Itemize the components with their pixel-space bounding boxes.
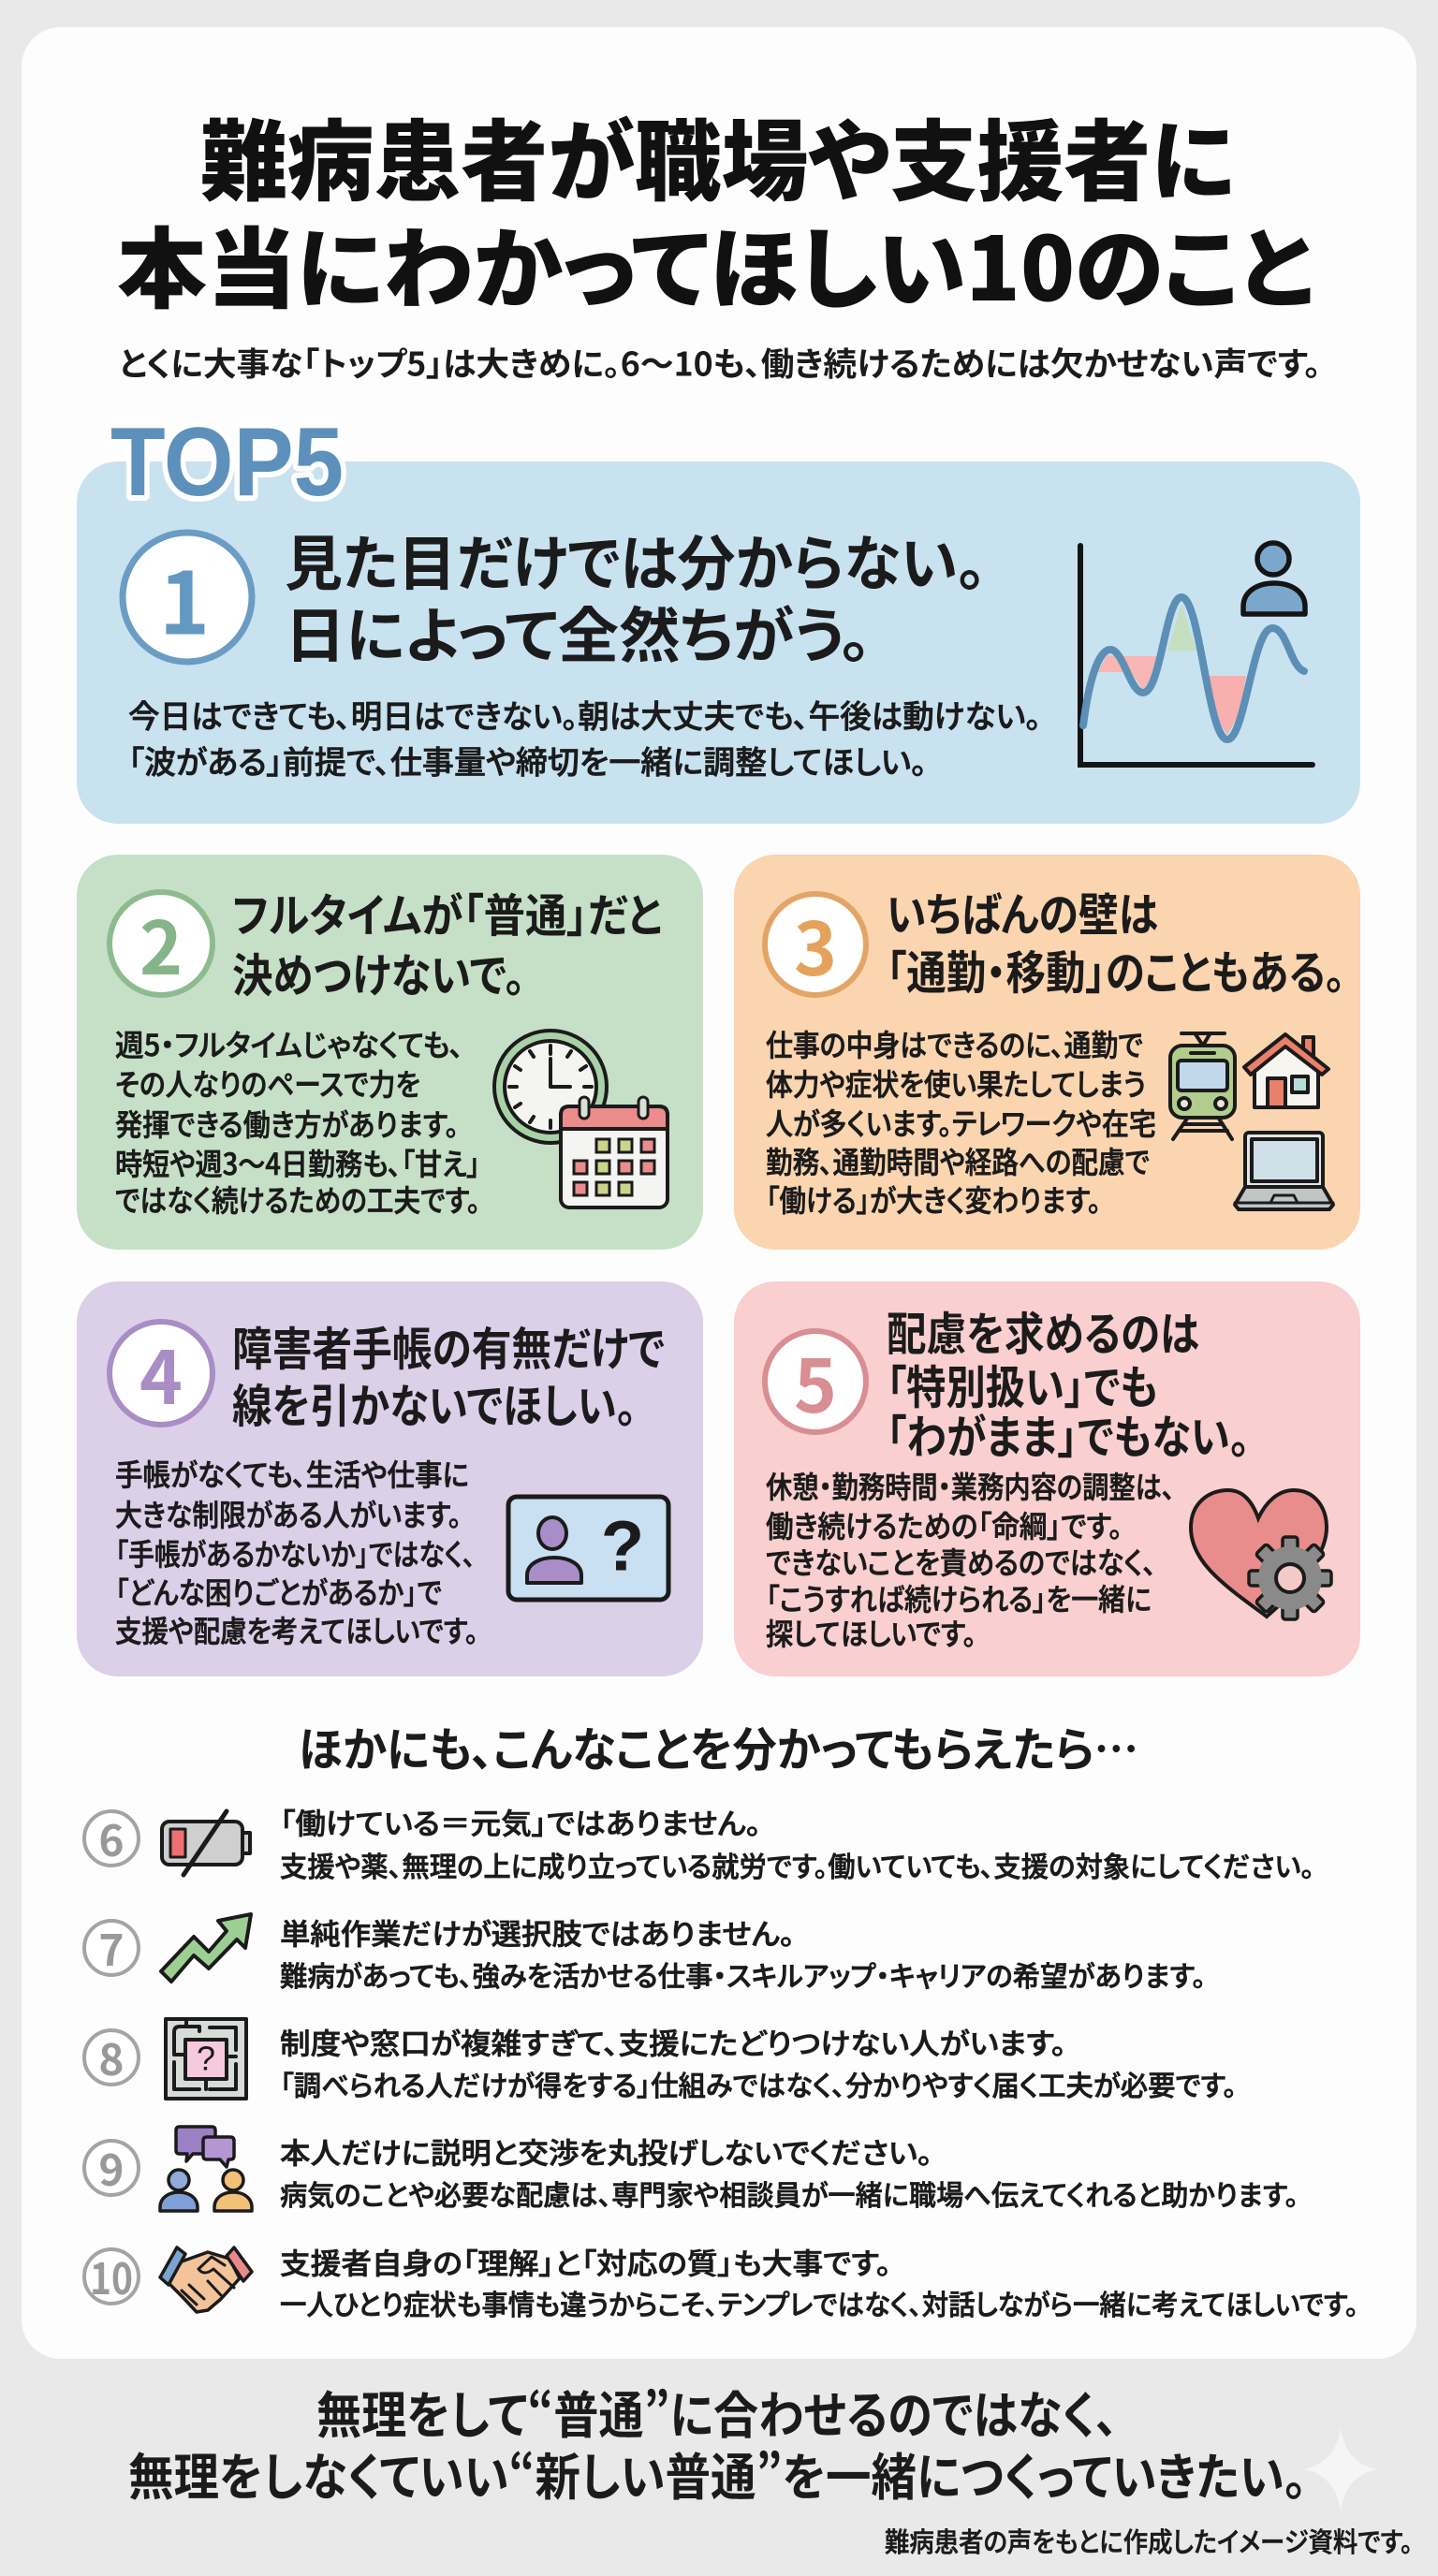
icon: handshake [160, 2247, 252, 2312]
heading 2: 決めつけないで。 [232, 940, 525, 1005]
text 10: 支援者自身の「理解」と「対応の質」も大事です。 [280, 2241, 891, 2282]
footer message [128, 2374, 1307, 2510]
text 7 [280, 1911, 1206, 1995]
body 3: 「働ける」が大きく変わります。 [766, 1178, 1101, 1221]
TOP5 label: TOP5 [110, 408, 344, 517]
footer message: 無理をしなくていい“新しい普通”を一緒につくっていきたい。 [128, 2436, 1307, 2510]
list item 6 [84, 1801, 1314, 1885]
body 5 [766, 1464, 1175, 1654]
list item 10 [84, 2241, 1358, 2323]
text 7: 難病があっても、強みを活かせる仕事・スキルアップ・キャリアの希望があります。 [280, 1954, 1206, 1995]
heading 4: 線を引かないでほしい。 [232, 1370, 637, 1436]
number badge 3 [765, 892, 866, 997]
body 1 [128, 691, 1041, 783]
number badge 5: 5 [794, 1329, 837, 1434]
sparkle [1303, 2428, 1377, 2510]
body 5: 休憩・勤務時間・業務内容の調整は、 [766, 1464, 1175, 1507]
list item 7 [84, 1911, 1206, 1995]
body 2: 週5・フルタイムじゃなくても、 [115, 1022, 463, 1065]
panel: card 3 [734, 855, 1360, 1250]
subtitle: とくに大事な「トップ5」は大きめに。6〜10も、働き続けるためには欠かせない声です。 [119, 339, 1321, 386]
panel: card 1 [77, 408, 1360, 824]
number badge 3: 3 [794, 892, 837, 997]
icon: clock and calendar [494, 1031, 668, 1208]
footer message: 無理をして“普通”に合わせるのではなく、 [316, 2374, 1118, 2449]
body 3: 体力や症状を使い果たしてしまう [766, 1061, 1146, 1105]
body 4: 手帳がなくても、生活や仕事に [115, 1452, 469, 1495]
heading 3: 「通勤・移動」のこともある。 [887, 936, 1345, 1003]
body 4: 「どんな困りごとがあるか」で [115, 1570, 442, 1613]
number badge 2 [110, 891, 213, 996]
badge 6 [84, 1808, 139, 1869]
text 8: 制度や窓口が複雑すぎて、支援にたどりつけない人がいます。 [280, 2020, 1066, 2063]
text 10 [280, 2241, 1358, 2323]
badge 7: 7 [98, 1917, 125, 1979]
body 4: 大きな制限がある人がいます。 [115, 1492, 462, 1535]
text 8: 「調べられる人だけが得をする」仕組みではなく、分かりやすく届く工夫が必要です。 [280, 2063, 1237, 2104]
number badge 2: 2 [139, 891, 183, 996]
text 9: 本人だけに説明と交渉を丸投げしないでください。 [280, 2130, 932, 2172]
badge 8: 8 [98, 2027, 125, 2088]
body 4 [115, 1452, 478, 1651]
badge 6: 6 [98, 1808, 125, 1869]
title: 本当にわかってほしい10のこと [117, 199, 1313, 327]
number badge 5 [765, 1329, 866, 1434]
title: 難病患者が職場や支援者に [200, 92, 1235, 219]
icon: two people talking [160, 2127, 252, 2211]
icon: train, house and laptop [1170, 1033, 1333, 1209]
text 9 [280, 2130, 1299, 2214]
body 5: 探してほしいです。 [766, 1611, 976, 1654]
text 6: 支援や薬、無理の上に成り立っている就労です。働いていても、支援の対象にしてください。 [280, 1844, 1314, 1885]
heading 1 [285, 517, 987, 675]
icon: wave chart with person [1080, 543, 1313, 765]
heading 5: 「わがまま」でもない。 [887, 1400, 1250, 1468]
heading 1: 日によって全然ちがう。 [285, 589, 872, 675]
heading 1: 見た目だけでは分からない。 [285, 517, 987, 603]
body 4: 支援や配慮を考えてほしいです。 [115, 1608, 478, 1651]
heading 5: 配慮を求めるのは [887, 1297, 1199, 1365]
number badge 1: 1 [159, 535, 210, 659]
number badge 1 [123, 533, 252, 662]
body 4: 「手帳があるかないか」ではなく、 [115, 1531, 476, 1574]
number badge 4: 4 [139, 1321, 183, 1426]
body 2 [115, 1022, 480, 1221]
heading 5: 「特別扱い」でも [887, 1352, 1158, 1417]
icon: maze [166, 2019, 246, 2099]
body 3 [766, 1022, 1156, 1221]
body 1: 「波がある」前提で、仕事量や締切を一緒に調整してほしい。 [128, 738, 927, 783]
heading 3 [887, 878, 1345, 1003]
text 9: 病気のことや必要な配慮は、専門家や相談員が一緒に職場へ伝えてくれると助かります。 [280, 2173, 1299, 2214]
heading 2: フルタイムが「普通」だと [232, 880, 662, 945]
number badge 4 [110, 1321, 213, 1426]
body 3: 勤務、通勤時間や経路への配慮で [766, 1139, 1150, 1182]
body 5: 働き続けるための「命綱」です。 [766, 1503, 1123, 1546]
body 2: 発揮できる働き方があります。 [115, 1102, 459, 1145]
body 2: ではなく続けるための工夫です。 [115, 1178, 480, 1221]
panel: card 5 [734, 1281, 1360, 1676]
text 10: 一人ひとり症状も事情も違うからこそ、テンプレではなく、対話しながら一緒に考えてほしいです。 [280, 2282, 1358, 2323]
title [117, 92, 1313, 327]
badge 8 [84, 2027, 139, 2088]
body 5: できないことを責めるのではなく、 [766, 1540, 1156, 1583]
icon: ID card with question mark: ? [601, 1507, 644, 1586]
text 6 [280, 1801, 1314, 1885]
heading 3: いちばんの壁は [887, 878, 1158, 945]
badge 9 [84, 2137, 139, 2199]
badge 9: 9 [98, 2137, 125, 2199]
text 8 [280, 2020, 1237, 2104]
heading: other items: ほかにも、こんなことを分かってもらえたら… [299, 1713, 1138, 1780]
panel: card 2 [77, 855, 703, 1250]
icon: ID card with question mark [508, 1497, 668, 1600]
body 2: 時短や週3〜4日勤務も、「甘え」 [115, 1141, 480, 1184]
heading 2 [232, 880, 662, 1005]
badge 7 [84, 1917, 139, 1979]
body 1: 今日はできても、明日はできない。朝は大丈夫でも、午後は動けない。 [128, 691, 1041, 738]
icon: rising arrow [161, 1914, 251, 1982]
body 3: 仕事の中身はできるのに、通勤で [766, 1022, 1143, 1065]
text 6: 「働けている＝元気」ではありません。 [280, 1801, 761, 1842]
heading 4 [232, 1312, 665, 1436]
body 5: 「こうすれば続けられる」を一緒に [766, 1576, 1152, 1619]
icon: heart and gear [1191, 1490, 1331, 1619]
list item 8 [84, 2019, 1237, 2104]
badge 10: 10 [90, 2246, 133, 2307]
body 2: その人なりのペースで力を [115, 1061, 420, 1105]
list item 9 [84, 2127, 1299, 2214]
heading 4: 障害者手帳の有無だけで [232, 1312, 665, 1380]
body 3: 人が多くいます。テレワークや在宅 [766, 1101, 1156, 1144]
heading 5 [887, 1297, 1250, 1468]
icon: maze: ? [197, 2039, 215, 2078]
text 7: 単純作業だけが選択肢ではありません。 [280, 1911, 795, 1953]
icon: low battery [162, 1811, 250, 1875]
panel: card 4 [77, 1281, 703, 1676]
